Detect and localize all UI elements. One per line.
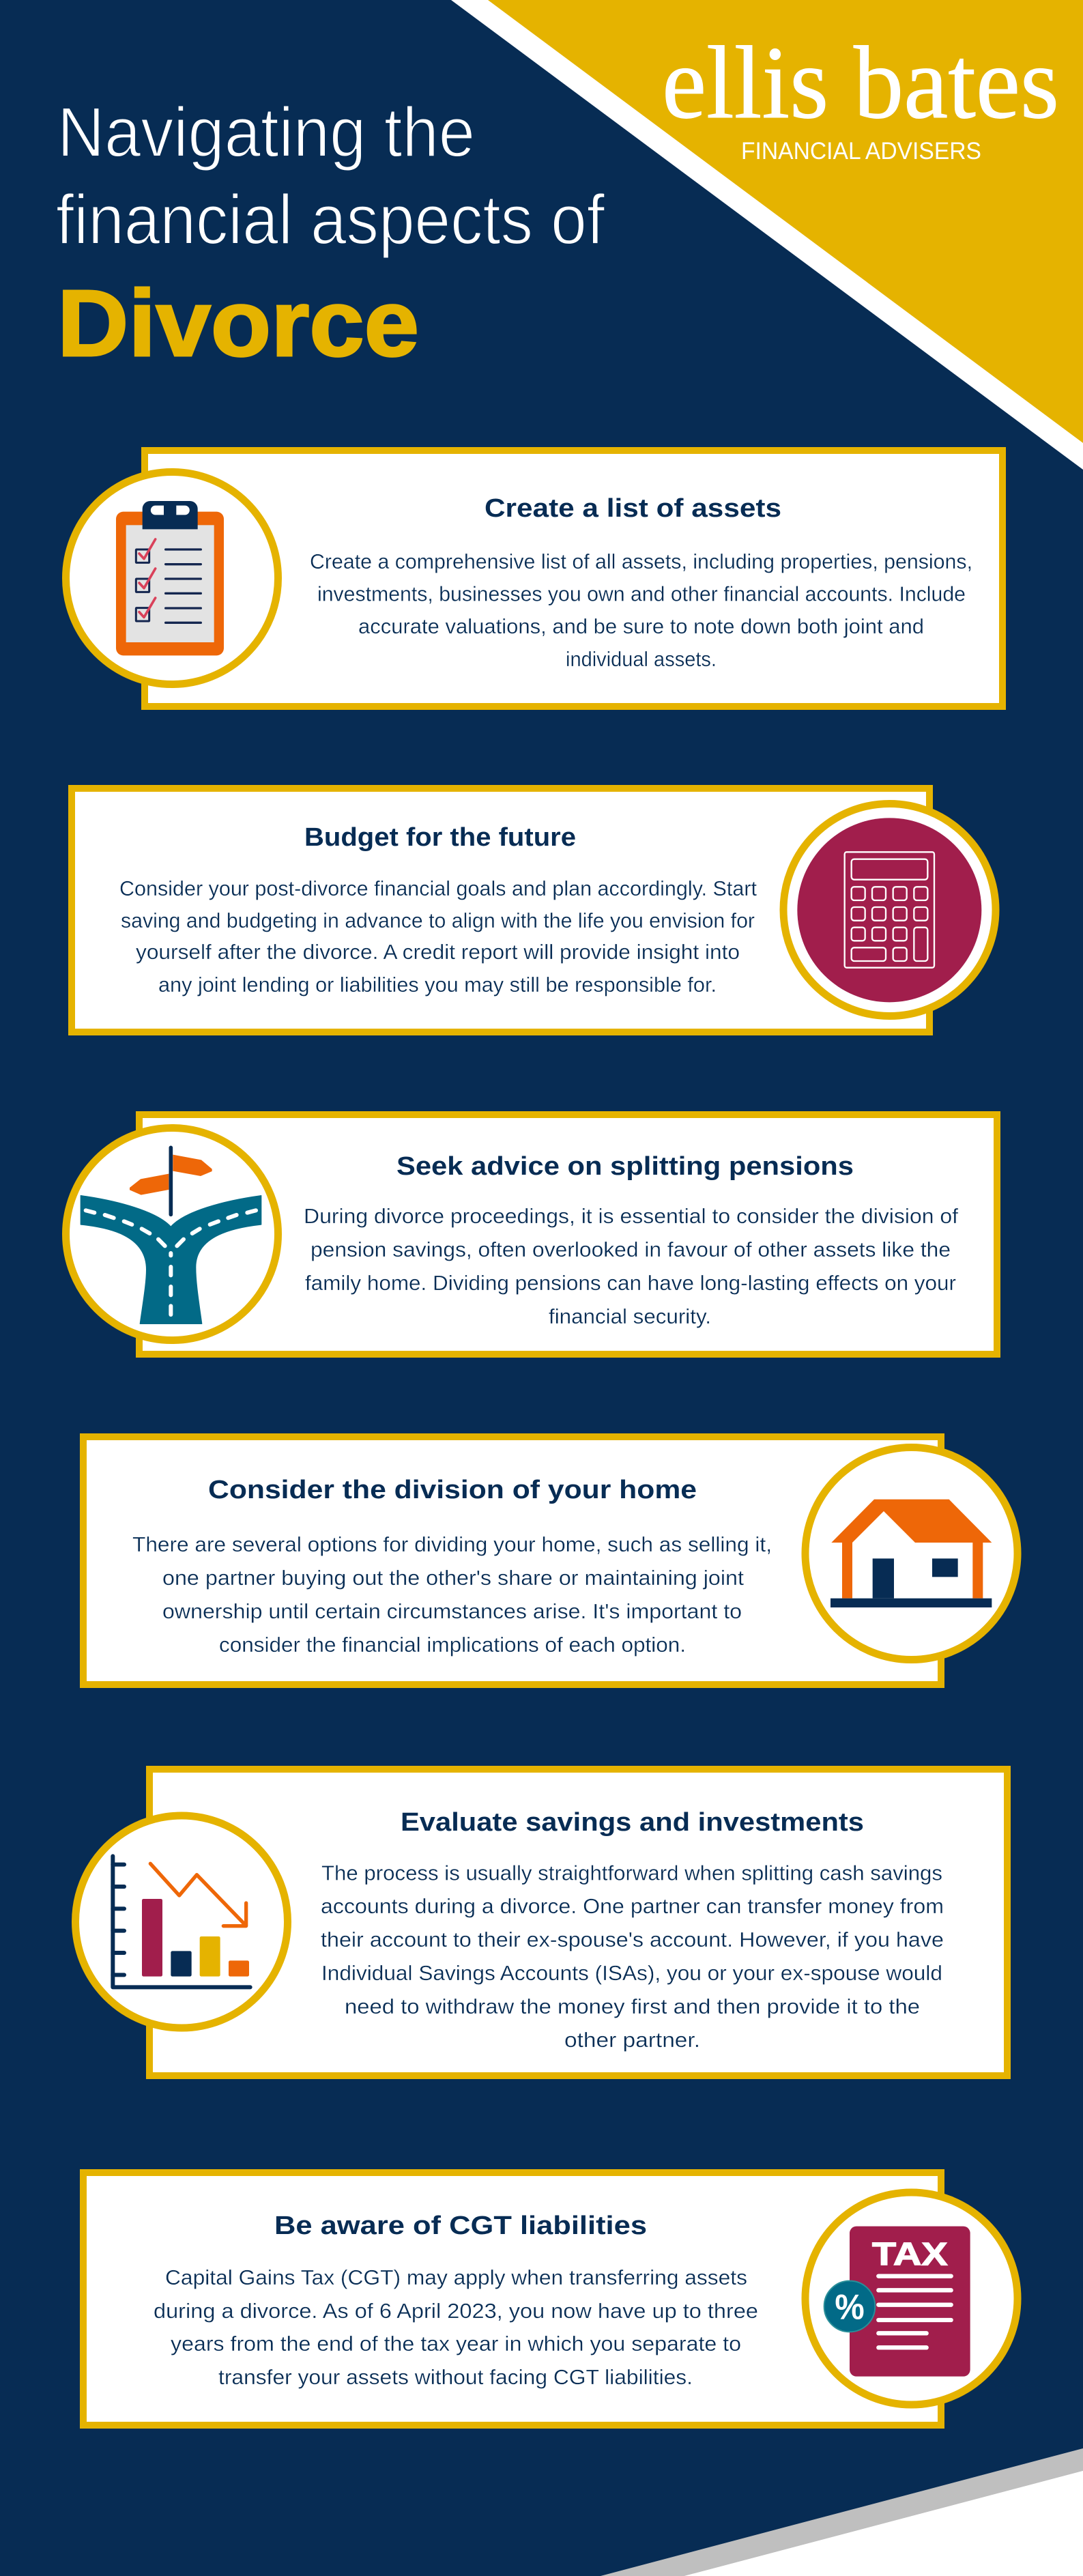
body text: yourself after the divorce. A credit report will provide insight into (136, 940, 740, 964)
icon circle (66, 1128, 278, 1341)
body text (132, 1532, 772, 1657)
title: Navigating the (57, 93, 475, 171)
body text: one partner buying out the other's share or maintaining joint (162, 1566, 744, 1590)
logo: ellis bates: ellis bates (662, 25, 1059, 140)
body text (321, 1861, 944, 2052)
body text: Create a comprehensive list of all assets, including properties, pensions, (310, 549, 972, 573)
body text (310, 549, 972, 671)
body text: during a divorce. As of 6 April 2023, you now have up to three (154, 2299, 758, 2323)
body text (154, 2265, 758, 2389)
heading: Be aware of CGT liabilities (274, 2212, 647, 2240)
icon: tax document with percent badge: % (835, 2287, 865, 2327)
body text: Individual Savings Accounts (ISAs), you or your ex-spouse would (321, 1961, 942, 1985)
panel: be aware of CGT liabilities (83, 2173, 1017, 2425)
body text: accurate valuations, and be sure to note down both joint and (358, 614, 924, 638)
heading: Evaluate savings and investments (401, 1808, 864, 1837)
card frame (145, 450, 1002, 706)
heading: Budget for the future (304, 823, 576, 852)
body text: accounts during a divorce. One partner can transfer money from (321, 1894, 944, 1918)
icon: clipboard checklist (116, 501, 224, 655)
icon circle (66, 472, 278, 684)
panel: seek advice on splitting pensions (66, 1115, 997, 1354)
heading: Consider the division of your home (208, 1476, 697, 1504)
body text: Consider your post-divorce financial goals and plan accordingly. Start (119, 876, 757, 900)
card frame (83, 1437, 941, 1685)
card frame (139, 1115, 997, 1354)
logo corner: white stripe and gold triangle (451, 0, 1083, 470)
body text: pension savings, often overlooked in favour of other assets like the (311, 1237, 951, 1261)
body text: ownership until certain circumstances arise. It's important to (162, 1599, 742, 1623)
body text: The process is usually straightforward when splitting cash savings (321, 1861, 942, 1885)
body text (304, 1204, 958, 1328)
logo: ellis bates: FINANCIAL ADVISERS (741, 138, 981, 164)
body text: transfer your assets without facing CGT liabilities. (218, 2365, 693, 2389)
body text: Capital Gains Tax (CGT) may apply when transferring assets (165, 2265, 747, 2289)
card frame (149, 1769, 1007, 2076)
body text (119, 876, 757, 997)
icon circle (805, 2192, 1017, 2405)
body text: other partner. (564, 2028, 700, 2052)
body text: need to withdraw the money first and then provide it to the (345, 1994, 920, 2018)
body text: investments, businesses you own and other financial accounts. Include (317, 582, 966, 606)
panel: create a list of assets (66, 450, 1002, 706)
icon: house (831, 1500, 992, 1607)
icon: forked road with signpost (81, 1147, 261, 1323)
icon circle (783, 804, 996, 1016)
icon circle (75, 1816, 288, 2028)
body text: individual assets. (566, 647, 717, 671)
title (56, 93, 605, 376)
icon: calculator (797, 818, 981, 1002)
heading: Seek advice on splitting pensions (396, 1152, 854, 1181)
title: Divorce (57, 271, 419, 376)
body text: saving and budgeting in advance to align with the life you envision for (121, 908, 755, 932)
body text: During divorce proceedings, it is essential to consider the division of (304, 1204, 958, 1228)
icon circle (805, 1447, 1017, 1660)
panel: evaluate savings and investments (75, 1769, 1007, 2076)
body text: their account to their ex-spouse's account. However, if you have (321, 1928, 944, 1951)
panel: consider the division of your home (83, 1437, 1017, 1685)
icon: tax document with percent badge: TAX (872, 2236, 948, 2272)
body text: any joint lending or liabilities you may still be responsible for. (158, 973, 717, 997)
title: financial aspects of (56, 180, 605, 259)
card frame (83, 2173, 941, 2425)
body text: financial security. (549, 1304, 711, 1328)
body text: There are several options for dividing your home, such as selling it, (132, 1532, 772, 1556)
icon: tax document with percent badge (824, 2227, 970, 2377)
panel: budget for the future (72, 788, 996, 1032)
body text: consider the financial implications of each option. (219, 1633, 686, 1657)
body text: family home. Dividing pensions can have long-lasting effects on your (305, 1271, 956, 1295)
icon: falling bar chart (113, 1856, 250, 1987)
card frame (72, 788, 929, 1032)
body text: years from the end of the tax year in which you separate to (171, 2332, 741, 2356)
heading: Create a list of assets (485, 494, 781, 523)
